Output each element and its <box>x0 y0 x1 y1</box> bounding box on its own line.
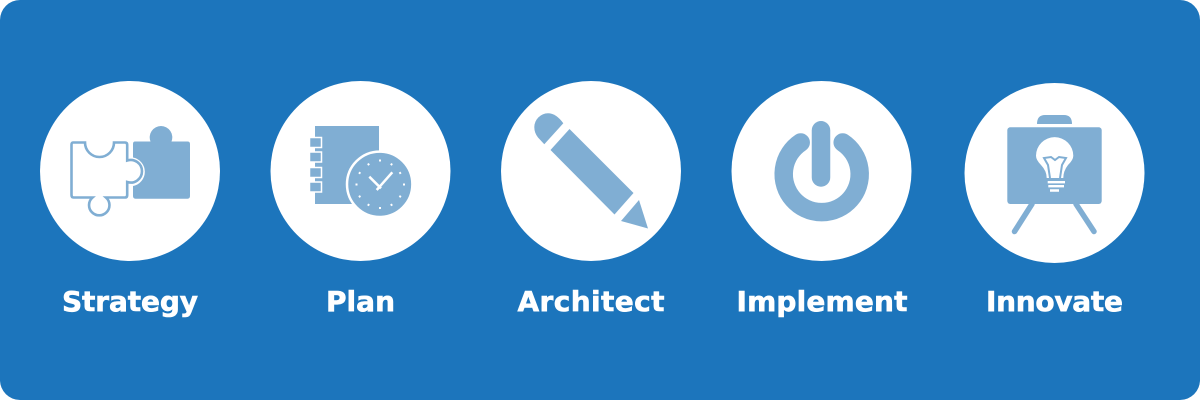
circle: Plan <box>270 81 450 261</box>
step: Strategy <box>40 81 220 318</box>
step: Innovate <box>964 83 1144 318</box>
circle: Innovate <box>964 83 1144 263</box>
step: Plan <box>270 81 450 318</box>
label: Architect: Architect <box>518 285 664 318</box>
icon: presentation board with light bulb <box>1007 115 1102 232</box>
icon: puzzle pieces <box>72 126 190 215</box>
step: Architect <box>501 81 681 318</box>
label: Plan: Plan <box>326 285 395 318</box>
circle: Implement <box>732 81 912 261</box>
label: Innovate: Innovate <box>986 285 1123 318</box>
step: Implement <box>732 81 912 318</box>
circle: Strategy <box>40 81 220 261</box>
circle: Architect <box>501 81 681 261</box>
icon: pencil <box>534 113 648 228</box>
label: Strategy: Strategy <box>62 285 198 318</box>
icon: power symbol <box>784 130 860 212</box>
icon: notebook and clock <box>310 126 412 217</box>
label: Implement: Implement <box>736 285 908 318</box>
